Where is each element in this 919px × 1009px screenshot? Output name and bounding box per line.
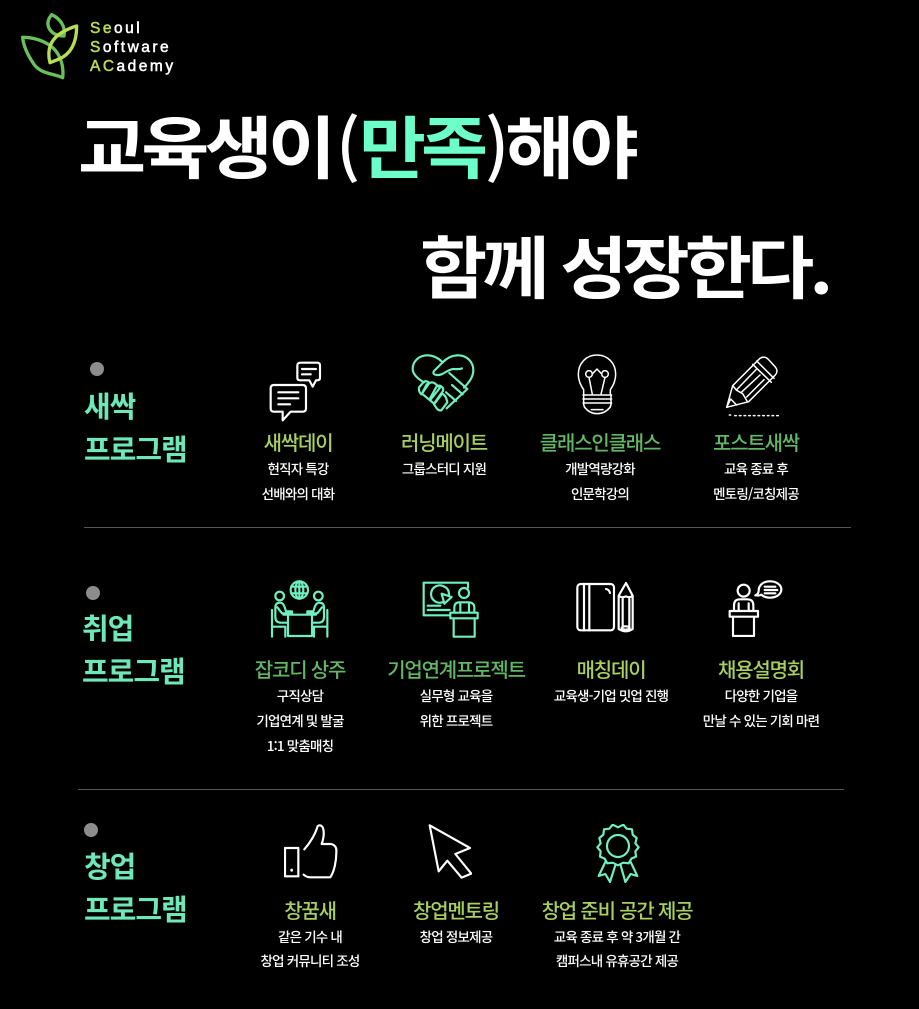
item title: 포스트새싹: [713, 427, 799, 456]
icon: light bulb: [578, 354, 616, 414]
item: 채용설명회: [703, 580, 819, 730]
item description: [507, 924, 727, 972]
item title: 매칭데이: [577, 654, 645, 683]
title line 1: [78, 94, 637, 194]
icon: award ribbon: [596, 824, 640, 883]
section heading: [82, 606, 185, 691]
item title: 창업멘토링: [413, 895, 499, 924]
icon: leaves: [21, 13, 78, 80]
item description: 창업 정보제공: [420, 926, 492, 946]
item description: 같은 기수 내: [278, 926, 342, 946]
item description: 캠퍼스내 유휴공간 제공: [556, 950, 678, 970]
section heading: [84, 384, 187, 469]
section marker dot: [84, 823, 98, 837]
icon: cursor arrow: [428, 824, 472, 879]
title: [78, 94, 828, 313]
section marker dot: [86, 586, 100, 600]
logo wordmark: [90, 20, 176, 75]
item: 창꿈새: [261, 824, 359, 970]
title word: 해야: [505, 94, 634, 193]
item: 창업멘토링: [413, 824, 499, 946]
logo wordmark: ACademy: [90, 58, 176, 75]
icon: speaker with bubble: [728, 580, 782, 637]
logo: Seoul Software Academy: [21, 13, 176, 80]
panel: 새싹 프로그램: [84, 354, 800, 503]
item: 러닝메이트: [401, 354, 488, 478]
item: 클래스인클래스: [540, 354, 660, 503]
title word: 교육생이: [78, 94, 331, 193]
icon: notebook and pencil: [576, 582, 634, 632]
item title: 창업 준비 공간 제공: [542, 895, 692, 924]
logo wordmark: Seoul: [90, 20, 142, 37]
item description: [262, 458, 335, 503]
opening parenthesis: (: [336, 95, 356, 194]
section heading: 창업: [84, 844, 135, 886]
logo wordmark: Software: [90, 39, 171, 56]
section heading: 프로그램: [84, 427, 187, 469]
icon: thumbs up: [284, 824, 338, 878]
item description: 위한 프로젝트: [420, 710, 492, 730]
icon: meeting at table: [270, 580, 328, 638]
section heading: 프로그램: [82, 649, 185, 691]
section marker dot: [90, 362, 104, 376]
item description: 교육 종료 후: [724, 458, 788, 478]
item description: [703, 685, 819, 730]
item description: [420, 685, 493, 730]
item description: 다양한 기업을: [725, 685, 797, 705]
item description: 1:1 맞춤매칭: [267, 735, 333, 755]
item description: 그룹스터디 지원: [402, 458, 486, 478]
item title: 잡코디 상주: [255, 654, 345, 683]
item description: [261, 926, 359, 970]
icon: presenter at board: [422, 582, 479, 638]
item title: 러닝메이트: [401, 427, 487, 456]
item description: 교육 종료 후 약 3개월 간: [554, 926, 680, 946]
closing parenthesis: ): [485, 95, 505, 194]
item description: 멘토링/코칭제공: [713, 483, 799, 503]
item description: [256, 685, 344, 755]
item: 새싹데이: [262, 362, 335, 503]
item: 기업연계프로젝트: [387, 582, 526, 730]
item description: [565, 458, 636, 503]
title line 2: 함께 성장한다.: [420, 214, 828, 313]
item description: 만날 수 있는 기회 마련: [703, 710, 819, 730]
item description: [713, 458, 799, 503]
icon: handshake heart: [412, 354, 474, 412]
item: 잡코디 상주: [255, 580, 346, 755]
item title: 기업연계프로젝트: [387, 654, 525, 683]
item title: 새싹데이: [264, 427, 332, 456]
section heading: 취업: [82, 606, 133, 648]
item title: 채용설명회: [718, 654, 804, 683]
section heading: 프로그램: [84, 887, 187, 929]
section heading: [84, 844, 187, 929]
item description: 실무형 교육을: [420, 685, 492, 705]
item: 창업 준비 공간 제공: [542, 824, 693, 970]
panel: 창업 프로그램: [84, 823, 693, 970]
item description: 개발역량강화: [565, 458, 635, 478]
item description: 창업 커뮤니티 조성: [261, 950, 359, 970]
panel: 취업 프로그램: [82, 580, 819, 755]
item title: 클래스인클래스: [540, 427, 660, 456]
item description: 선배와의 대화: [262, 483, 334, 503]
item description: 기업연계 및 발굴: [256, 710, 344, 730]
item: 매칭데이: [554, 582, 668, 705]
icon: pencil: [726, 356, 780, 416]
item description: 인문학강의: [571, 483, 629, 503]
item description: 구직상담: [277, 685, 323, 705]
item description: 교육생-기업 밋업 진행: [554, 685, 668, 705]
icon: speech bubbles: [270, 362, 322, 422]
section heading: 새싹: [84, 384, 135, 426]
item title: 창꿈새: [284, 895, 336, 924]
item description: 현직자 특강: [267, 458, 329, 478]
item: 포스트새싹: [713, 356, 800, 503]
highlighted word: 만족: [359, 94, 483, 193]
